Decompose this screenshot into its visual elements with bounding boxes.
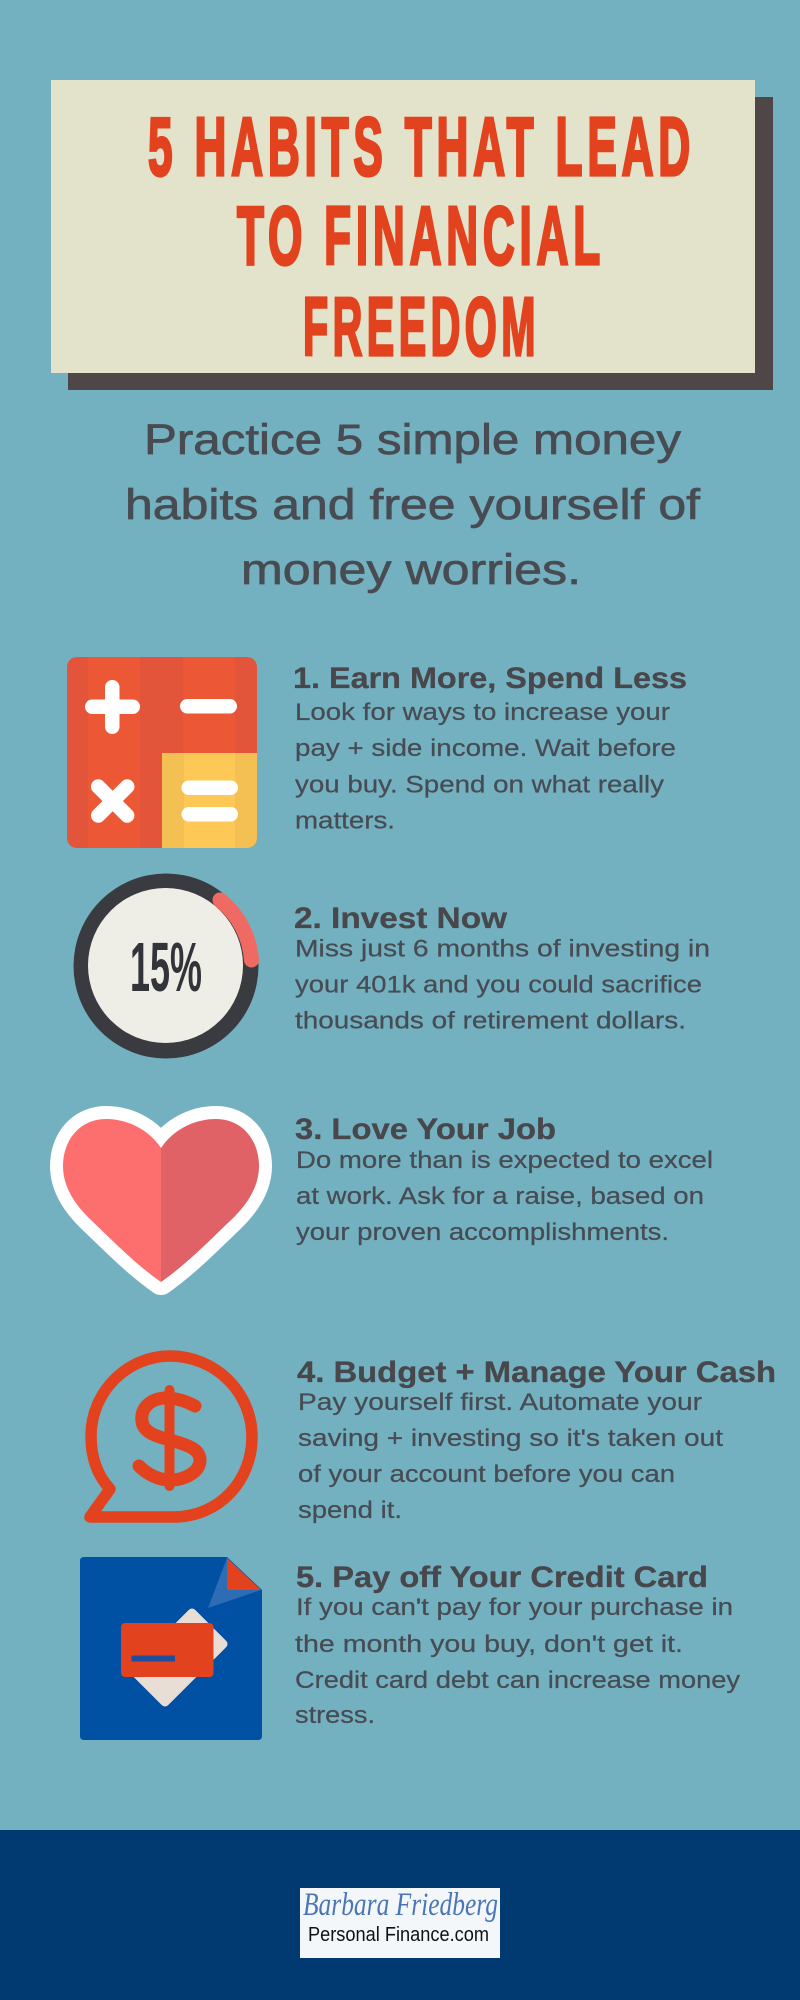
- heading and text: habit 1: Look for ways to increase your: [295, 699, 670, 726]
- subtitle: Practice 5 simple money: [144, 416, 682, 464]
- heading and text: habit 2: [294, 902, 710, 1034]
- heading and text: habit 2: Miss just 6 months of investing in: [295, 936, 710, 962]
- heading and text: habit 4: 4. Budget + Manage Your Cash: [297, 1356, 776, 1389]
- icon: credit card document: [80, 1557, 262, 1740]
- heading and text: habit 3: at work. Ask for a raise, based on: [296, 1183, 704, 1210]
- title panel: [51, 80, 773, 390]
- heading and text: habit 4: of your account before you can: [298, 1461, 675, 1488]
- heading and text: habit 5: [295, 1561, 740, 1729]
- heading and text: habit 2: 2. Invest Now: [294, 902, 508, 935]
- icon: 15 percent ring: [74, 874, 258, 1058]
- heading and text: habit 3: [295, 1113, 713, 1246]
- icon: dollar speech bubble: [90, 1356, 252, 1517]
- heading and text: habit 3: your proven accomplishments.: [296, 1219, 669, 1246]
- heading and text: habit 5: Credit card debt can increase money: [295, 1667, 740, 1694]
- heading and text: habit 4: Pay yourself first. Automate your: [298, 1389, 702, 1416]
- heading and text: habit 2: thousands of retirement dollars.: [295, 1008, 686, 1034]
- heading and text: habit 1: [293, 662, 687, 834]
- subtitle: habits and free yourself of: [125, 481, 701, 529]
- icon: 15 percent ring: 15%: [130, 928, 202, 1006]
- logo: [300, 1887, 500, 1958]
- heading and text: habit 5: 5. Pay off Your Credit Card: [296, 1561, 708, 1594]
- footer band: [0, 1830, 800, 2000]
- icon: calculator: [67, 657, 257, 848]
- heading and text: habit 2: your 401k and you could sacrifice: [295, 972, 702, 998]
- subtitle: [125, 416, 701, 594]
- heading and text: habit 1: you buy. Spend on what really: [295, 772, 664, 798]
- logo: Barbara Friedberg: [303, 1887, 498, 1923]
- heading and text: habit 4: spend it.: [298, 1497, 402, 1524]
- heading and text: habit 4: [297, 1356, 776, 1524]
- title: [148, 100, 695, 373]
- heading and text: habit 1: 1. Earn More, Spend Less: [293, 662, 687, 695]
- subtitle: money worries.: [241, 546, 581, 594]
- heading and text: habit 1: matters.: [295, 808, 395, 834]
- heading and text: habit 5: stress.: [295, 1702, 375, 1729]
- heading and text: habit 4: saving + investing so it's taken out: [298, 1425, 723, 1452]
- icon: heart: [63, 1119, 259, 1282]
- heading and text: habit 5: If you can't pay for your purchase in: [296, 1594, 733, 1621]
- title: FREEDOM: [303, 280, 540, 373]
- heading and text: habit 5: the month you buy, don't get it.: [295, 1631, 683, 1658]
- heading and text: habit 1: pay + side income. Wait before: [295, 735, 676, 762]
- heading and text: habit 3: Do more than is expected to excel: [296, 1147, 713, 1174]
- logo: Personal Finance.com: [308, 1924, 489, 1946]
- heading and text: habit 3: 3. Love Your Job: [295, 1113, 556, 1146]
